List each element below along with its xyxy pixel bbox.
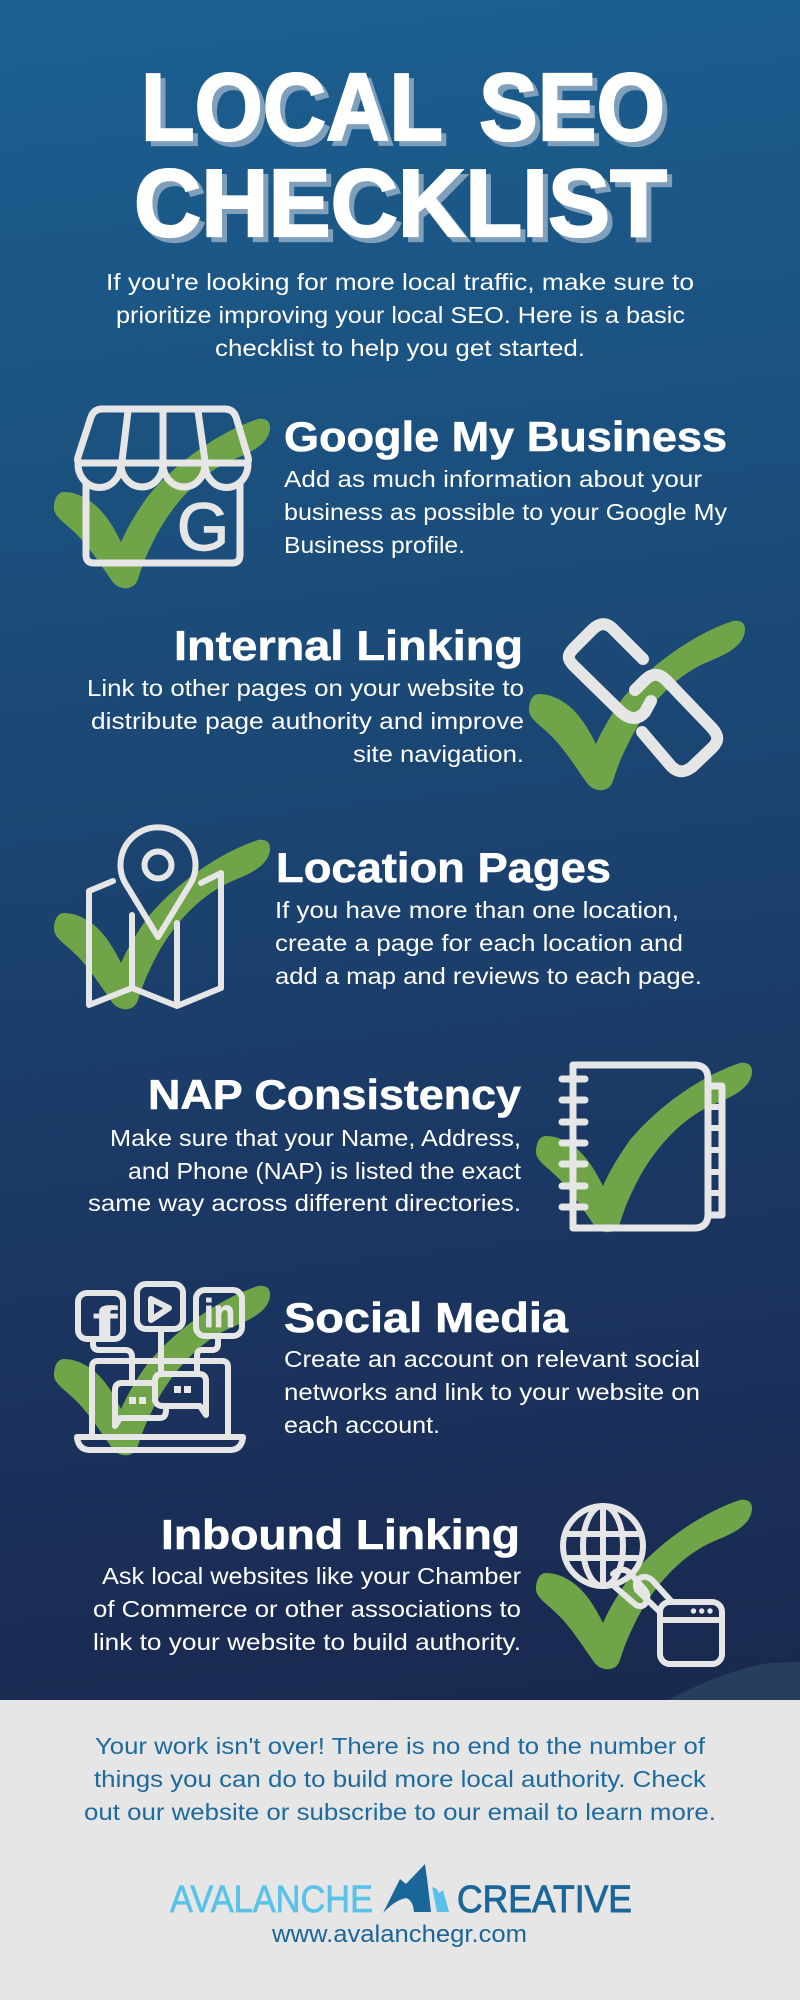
footer text: Your work isn't over! There is no end to the number of — [95, 1733, 706, 1759]
description: and Phone (NAP) is listed the exact — [128, 1158, 522, 1184]
title: CHECKLIST — [134, 150, 667, 257]
logo: Avalanche Creative — [170, 1864, 632, 1921]
description: Make sure that your Name, Address, — [110, 1125, 521, 1151]
decorative wave — [668, 1662, 800, 1700]
description: add a map and reviews to each page. — [275, 963, 702, 989]
logo: Avalanche Creative: CREATIVE — [457, 1879, 632, 1921]
website url: www.avalanchegr.com — [271, 1921, 527, 1948]
intro text: prioritize improving your local SEO. Here is a basic — [116, 302, 685, 328]
panel: NAP Consistency — [88, 1063, 752, 1232]
panel: Internal Linking — [87, 621, 745, 790]
logo: Avalanche Creative: AVALANCHE — [170, 1879, 373, 1921]
intro text: checklist to help you get started. — [215, 335, 585, 361]
icon: check mark, map and pin — [54, 827, 270, 1009]
icon: check mark and storefront — [54, 409, 270, 588]
chat dots — [129, 1386, 191, 1404]
title: SEO — [479, 54, 665, 161]
facebook and linkedin letters: f — [93, 1298, 118, 1347]
panel: Social Media — [54, 1284, 700, 1455]
description — [284, 466, 728, 558]
description: site navigation. — [353, 741, 524, 767]
description — [275, 897, 702, 989]
description: Business profile. — [284, 532, 465, 558]
facebook and linkedin letters: in — [204, 1292, 235, 1336]
icon: check mark and storefront: G — [177, 490, 229, 565]
description: If you have more than one location, — [275, 897, 679, 923]
heading: Social Media — [284, 1294, 569, 1341]
footer text — [84, 1733, 716, 1825]
footer text: out our website or subscribe to our email to learn more. — [84, 1799, 716, 1825]
intro text — [106, 269, 694, 361]
description: networks and link to your website on — [284, 1379, 700, 1405]
heading: NAP Consistency — [148, 1071, 522, 1118]
heading: Inbound Linking — [161, 1511, 520, 1558]
icon: check mark, globe, chain and browser window — [536, 1500, 752, 1669]
footer text: things you can do to build more local authority. Check — [94, 1766, 707, 1792]
panel: Location Pages — [54, 827, 702, 1009]
description: distribute page authority and improve — [91, 708, 524, 734]
icon: check mark and chain link — [529, 621, 745, 790]
description: each account. — [284, 1412, 440, 1438]
description: Create an account on relevant social — [284, 1346, 700, 1372]
description: same way across different directories. — [88, 1190, 521, 1216]
description — [284, 1346, 700, 1438]
logo mark: mountain — [383, 1864, 449, 1913]
intro text: If you're looking for more local traffic, make sure to — [106, 269, 694, 295]
panel: Inbound Linking — [93, 1500, 752, 1669]
description: Ask local websites like your Chamber — [102, 1563, 521, 1589]
description: business as possible to your Google My — [284, 499, 728, 525]
description — [87, 675, 524, 767]
heading: Google My Business — [284, 413, 727, 460]
description: Link to other pages on your website to — [87, 675, 524, 701]
description: Add as much information about your — [284, 466, 702, 492]
description — [93, 1563, 521, 1655]
window dots — [691, 1608, 713, 1614]
description: link to your website to build authority. — [93, 1629, 521, 1655]
facebook and linkedin letters — [93, 1292, 235, 1347]
panel: footer — [0, 1700, 800, 2000]
description: create a page for each location and — [275, 930, 683, 956]
heading: Internal Linking — [174, 622, 523, 669]
description: of Commerce or other associations to — [93, 1596, 521, 1622]
icon: check mark, laptop and social networks — [54, 1284, 270, 1455]
heading: Location Pages — [276, 844, 611, 891]
title — [134, 54, 667, 257]
description — [88, 1125, 522, 1216]
panel: Google My Business — [54, 409, 728, 588]
title: LOCAL — [141, 54, 443, 161]
icon: check mark and notebook — [536, 1063, 752, 1232]
